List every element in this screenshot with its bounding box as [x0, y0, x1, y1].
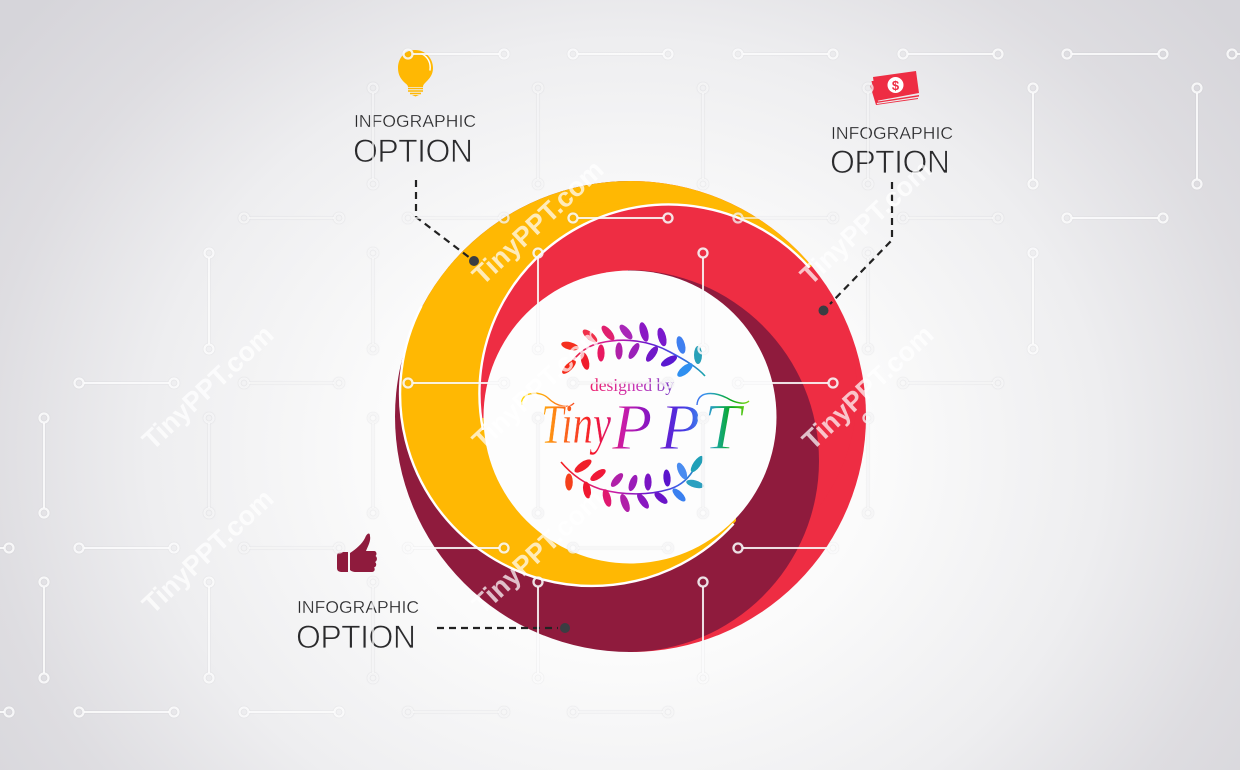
center logo — [522, 321, 749, 513]
TinyPPT script wordmark: PPT — [611, 391, 745, 464]
upper leaf branch — [560, 321, 705, 379]
watermarks: TinyPPT.com — [136, 483, 279, 620]
label: top left option — [353, 111, 476, 169]
label: top right option: OPTION — [830, 144, 950, 180]
icon: light bulb — [398, 50, 433, 96]
watermarks: TinyPPT.com — [466, 154, 609, 291]
watermarks: TinyPPT.com — [466, 319, 609, 456]
lower leaf branch — [561, 454, 705, 513]
TinyPPT script wordmark: Tiny — [541, 394, 611, 456]
TinyPPT script wordmark — [522, 391, 749, 464]
label: top left option: OPTION — [353, 133, 473, 169]
watermarks — [136, 154, 939, 620]
label: top left option: INFOGRAPHIC — [354, 111, 476, 131]
label: top right option: INFOGRAPHIC — [831, 123, 953, 143]
label: bottom left option: INFOGRAPHIC — [297, 597, 419, 617]
label: top right option — [830, 123, 953, 180]
watermarks: TinyPPT.com — [794, 154, 937, 291]
callout: yellow pointer — [416, 180, 479, 266]
icon: money stack — [870, 71, 919, 105]
watermarks: TinyPPT.com — [796, 319, 939, 456]
ring diagram — [395, 181, 866, 652]
watermarks: TinyPPT.com — [466, 483, 609, 620]
label: bottom left option — [296, 597, 419, 655]
callout: maroon pointer — [437, 623, 570, 633]
callout: red pointer — [818, 182, 892, 316]
label: bottom left option: OPTION — [296, 619, 416, 655]
icon: thumbs up — [337, 534, 377, 572]
icon: money stack: $ — [892, 78, 900, 93]
watermarks: TinyPPT.com — [136, 319, 279, 456]
designed by: designed by — [590, 375, 674, 395]
